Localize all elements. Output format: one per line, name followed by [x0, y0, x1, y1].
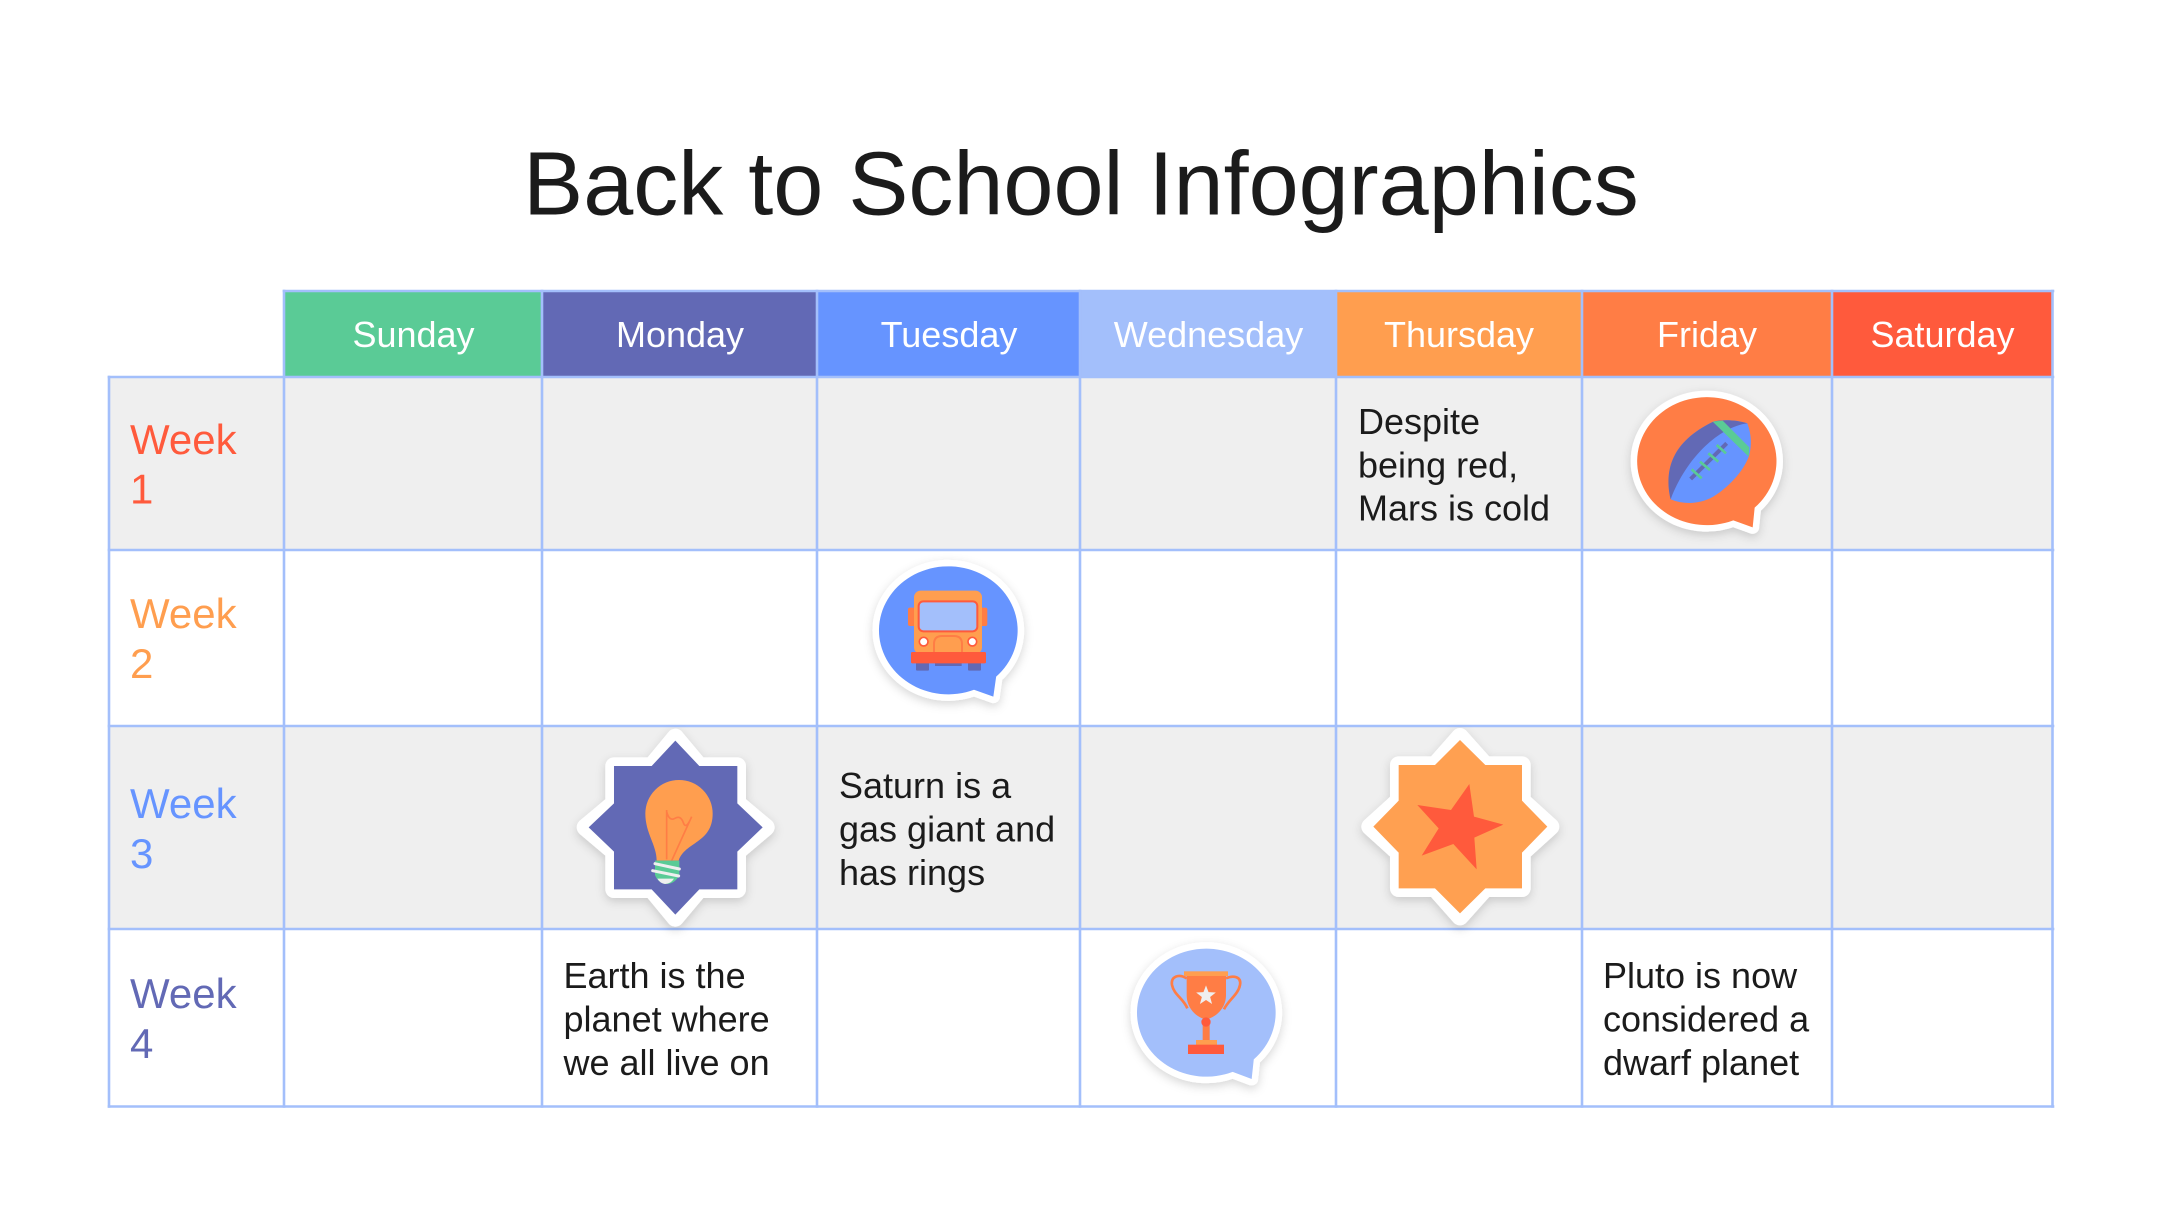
header: Monday: Monday [616, 314, 744, 355]
header: Monday [542, 291, 817, 377]
icon: football speech bubble [1637, 397, 1776, 527]
icon: light bulb star badge [585, 737, 766, 918]
label: week 4: Week [130, 970, 238, 1017]
row band: week 3 [109, 726, 2053, 929]
note: Mars: Despite [1358, 401, 1480, 442]
header: Thursday: Thursday [1384, 314, 1534, 355]
header: Saturday [1832, 291, 2053, 377]
note: Earth: we all live on [562, 1042, 770, 1083]
label: week 1: Week [130, 416, 238, 463]
note: Earth: Earth is the [564, 955, 746, 996]
row band: week 1 [109, 377, 2053, 550]
label: week 3: 3 [130, 830, 153, 877]
header: Saturday: Saturday [1870, 314, 2015, 355]
label: week 2: 2 [130, 640, 153, 687]
header: Sunday [284, 291, 542, 377]
header: Tuesday [817, 291, 1080, 377]
note: Saturn: gas giant and [839, 808, 1055, 850]
header: Wednesday [1080, 291, 1336, 377]
label: week 3: Week [130, 780, 238, 827]
note: Saturn: has rings [839, 852, 985, 893]
icon: bus speech bubble [879, 566, 1018, 697]
header: Tuesday: Tuesday [881, 314, 1017, 355]
label: week 4: 4 [130, 1020, 153, 1067]
header: Sunday: Sunday [352, 314, 475, 355]
note: Saturn: Saturn is a [839, 765, 1012, 806]
header: Friday [1582, 291, 1832, 377]
label: week 1: 1 [130, 466, 153, 512]
label: week 2: Week [130, 590, 238, 637]
header: Thursday [1336, 291, 1582, 377]
title: Back to School Infographics [523, 134, 1639, 234]
note: Mars: Mars is cold [1358, 488, 1550, 528]
note: Pluto: dwarf planet [1603, 1042, 1799, 1083]
calendar table [109, 291, 2053, 1106]
note: Earth: planet where [564, 998, 770, 1040]
note: Pluto: Pluto is now [1603, 955, 1798, 996]
icon: star badge [1370, 737, 1551, 917]
header: Wednesday: Wednesday [1114, 314, 1303, 355]
note: Mars: being red, [1358, 444, 1518, 486]
header: Friday: Friday [1657, 314, 1757, 355]
note: Pluto: considered a [1603, 998, 1810, 1040]
icon: trophy speech bubble [1137, 949, 1276, 1079]
